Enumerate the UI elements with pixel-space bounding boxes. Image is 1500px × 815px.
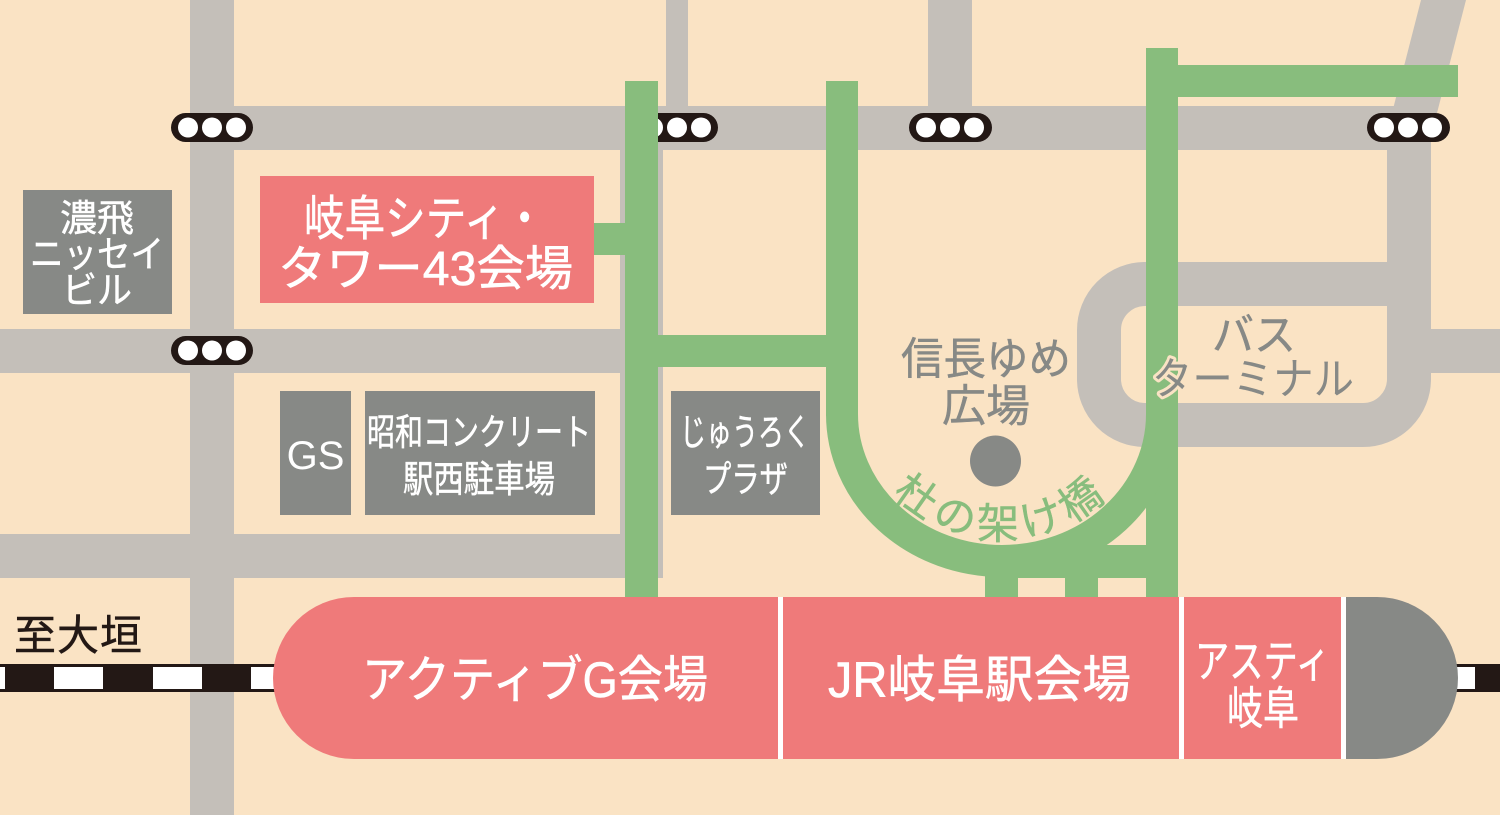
label: バスターミナル: [1152, 311, 1354, 404]
building: GS: GS: [287, 434, 344, 478]
venue: 岐阜シティ・タワー43会場: タワー43会場: [278, 243, 573, 296]
traffic light 4: [1367, 113, 1450, 142]
building: 濃飛ニッセイビル: ニッセイ: [30, 234, 164, 275]
venue: 岐阜シティ・タワー43会場: 岐阜シティ・: [304, 193, 545, 246]
building: 濃飛ニッセイビル: ビル: [62, 270, 132, 311]
monument dot: [970, 436, 1021, 486]
building: 濃飛ニッセイビル: [23, 190, 172, 314]
label: バスターミナル: ターミナル: [1152, 355, 1354, 404]
building: GS: [280, 391, 351, 515]
venue: 岐阜シティ・タワー43会場: [260, 176, 594, 303]
venue: JR岐阜駅会場: [783, 597, 1179, 759]
railway line: [0, 664, 1500, 692]
label: バスターミナル: バス: [1212, 311, 1296, 360]
venue: JR岐阜駅会場: JR岐阜駅会場: [828, 652, 1131, 708]
label: 信長ゆめ広場: [901, 335, 1071, 431]
label: 信長ゆめ広場: 信長ゆめ: [901, 335, 1071, 384]
label: 至大垣: 至大垣: [14, 612, 142, 659]
traffic light 5: [171, 336, 253, 365]
traffic light 1: [171, 113, 253, 142]
label: 杜の架け橋: 杜の架け橋: [896, 472, 1105, 542]
label: 信長ゆめ広場: 広場: [942, 382, 1030, 431]
building: 濃飛ニッセイビル: 濃飛: [60, 198, 134, 239]
station complex: [273, 597, 1458, 759]
venue: アスティ岐阜: [1184, 597, 1341, 759]
building: じゅうろくプラザ: じゅうろく: [680, 412, 810, 453]
building: 昭和コンクリート駅西駐車場: [365, 391, 595, 515]
green pedestrian decks: [594, 48, 1458, 597]
building: 昭和コンクリート駅西駐車場: 駅西駐車場: [403, 459, 555, 500]
venue: アクティブG会場: [273, 597, 778, 759]
building: じゅうろくプラザ: [671, 391, 820, 515]
building: じゅうろくプラザ: プラザ: [703, 459, 788, 500]
station end cap: [1346, 597, 1458, 759]
venue: アスティ岐阜: アスティ: [1195, 636, 1330, 687]
traffic light 3: [909, 113, 992, 142]
venue: アクティブG会場: アクティブG会場: [362, 652, 708, 708]
building: 昭和コンクリート駅西駐車場: 昭和コンクリート: [367, 412, 591, 453]
venue: アスティ岐阜: 岐阜: [1227, 683, 1299, 734]
traffic light 2: [636, 113, 718, 142]
